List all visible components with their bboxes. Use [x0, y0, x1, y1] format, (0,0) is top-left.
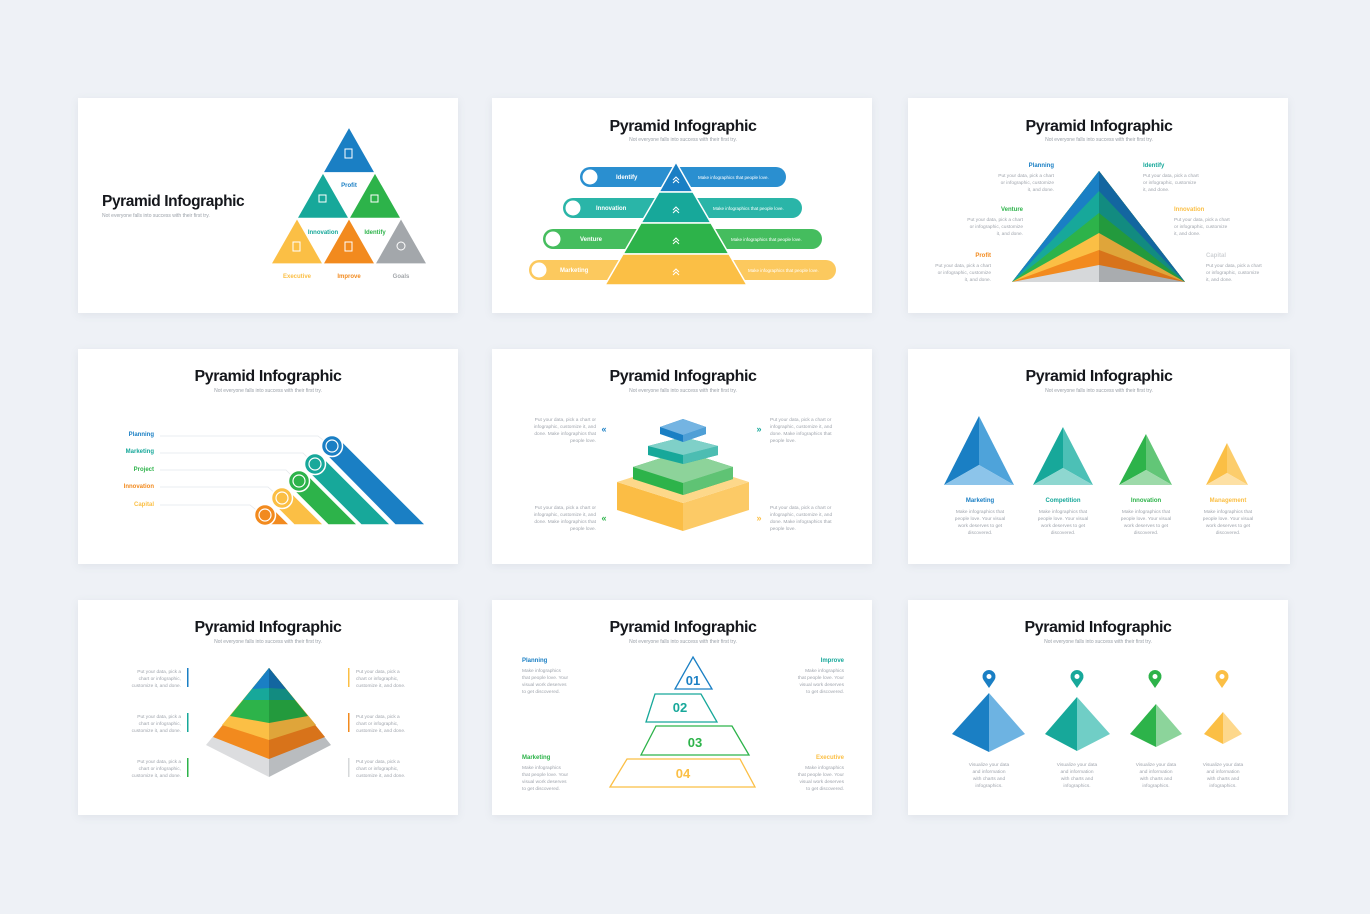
left labels: Venture [1001, 207, 1024, 213]
left labels: Profit [975, 253, 991, 259]
side texts: to get discovered. [806, 689, 844, 695]
text blocks: Put your data, pick a chart or [535, 505, 596, 511]
numbers [673, 673, 702, 781]
text blocks: infographic, customize it, and [770, 512, 832, 518]
title: Pyramid Infographic [102, 193, 245, 210]
panel: slide 2 pyramid with pills [492, 98, 872, 313]
labels: Competition [1046, 498, 1081, 504]
title: Not everyone falls into success with their first try. [102, 213, 210, 219]
text blocks: Put your data, pick a [356, 759, 400, 765]
side texts: to get discovered. [522, 786, 560, 792]
bands [254, 436, 426, 526]
side texts: visual work deserves [799, 682, 845, 688]
title: Pyramid Infographic [609, 118, 757, 135]
captions: Visualize your data [1136, 762, 1177, 768]
text blocks: done. Make infographics that [534, 431, 597, 437]
text blocks: customize it, and done. [132, 728, 181, 734]
text blocks: done. Make infographics that [770, 519, 832, 525]
labels: work deserves to get [1206, 523, 1251, 529]
side texts: Improve [821, 658, 845, 664]
left labels: Planning [1029, 163, 1054, 169]
left labels [935, 163, 1055, 283]
text blocks: Put your data, pick a [137, 714, 181, 720]
text blocks: infographic, customize it, and [534, 424, 596, 430]
labels: Planning [129, 432, 154, 438]
pills: Identify [616, 175, 638, 181]
title [1025, 118, 1173, 143]
title: Not everyone falls into success with their first try. [629, 137, 737, 143]
labels: Make infographics that [1039, 509, 1088, 515]
text blocks: chart or infographic, [139, 676, 181, 682]
chevrons: » [756, 513, 762, 523]
pills: Make infographics that people love. [698, 175, 769, 180]
left labels: or infographic, customize [1001, 180, 1054, 186]
labels: work deserves to get [1124, 523, 1169, 529]
chevrons [601, 424, 762, 523]
title [609, 118, 757, 143]
right labels: Put your data, pick a chart [1174, 217, 1230, 223]
text blocks: Put your data, pick a chart or [770, 417, 832, 423]
title: Not everyone falls into success with their first try. [1045, 137, 1153, 143]
labels: Make infographics that [1204, 509, 1253, 515]
pills: Make infographics that people love. [748, 268, 819, 273]
labels: Marketing [126, 449, 154, 455]
text blocks: chart or infographic, [356, 676, 398, 682]
captions: infographics. [975, 783, 1003, 789]
captions: Visualize your data [1203, 762, 1244, 768]
text blocks: Put your data, pick a [137, 669, 181, 675]
text blocks: chart or infographic, [139, 721, 181, 727]
triangles [944, 416, 1248, 485]
text blocks: Put your data, pick a chart or [770, 505, 832, 511]
title: Not everyone falls into success with their first try. [214, 388, 322, 394]
text blocks [132, 669, 405, 779]
title: Not everyone falls into success with their first try. [1044, 639, 1152, 645]
chevrons: » [756, 424, 762, 434]
title: Not everyone falls into success with their first try. [1045, 388, 1153, 394]
title [609, 368, 757, 394]
side texts: Make infographics [805, 765, 845, 771]
captions: infographics. [1063, 783, 1091, 789]
labels: people love. Your visual [1038, 516, 1088, 522]
numbers: 02 [673, 700, 687, 715]
text blocks: people love. [570, 438, 596, 444]
text blocks [534, 417, 832, 532]
captions: Visualize your data [1057, 762, 1098, 768]
text blocks: infographic, customize it, and [534, 512, 596, 518]
text blocks: chart or infographic, [356, 766, 398, 772]
labels: Capital [134, 502, 154, 508]
title: Pyramid Infographic [1024, 619, 1172, 636]
side texts: Make infographics [522, 765, 562, 771]
title: Pyramid Infographic [194, 368, 342, 385]
panel: slide 5 stepped pyramid [492, 349, 872, 564]
side texts: Executive [816, 755, 845, 761]
text blocks: customize it, and done. [356, 683, 405, 689]
text blocks: customize it, and done. [356, 728, 405, 734]
labels: discovered. [1216, 530, 1240, 536]
triangle labels: Executive [283, 274, 312, 280]
text blocks: customize it, and done. [132, 683, 181, 689]
panel: slide 6 four triangles [908, 349, 1290, 564]
pills: Make infographics that people love. [713, 206, 784, 211]
labels: Innovation [124, 484, 154, 490]
chevrons: « [601, 424, 607, 434]
side texts: visual work deserves [522, 779, 567, 785]
text blocks: done. Make infographics that [770, 431, 832, 437]
side texts: that people love. Your [522, 772, 569, 778]
pills: Make infographics that people love. [731, 237, 802, 242]
numbers: 01 [686, 673, 700, 688]
side texts: Marketing [522, 755, 551, 761]
side texts: to get discovered. [522, 689, 560, 695]
icons in triangles [293, 149, 405, 251]
text blocks: Put your data, pick a [137, 759, 181, 765]
title: Not everyone falls into success with their first try. [629, 639, 737, 645]
captions: with charts and [1207, 776, 1239, 782]
text blocks: Put your data, pick a chart or [535, 417, 596, 423]
title [194, 368, 342, 394]
labels: discovered. [1051, 530, 1075, 536]
right labels: Innovation [1174, 207, 1205, 213]
stepped pyramid [617, 419, 749, 531]
leader lines [160, 436, 328, 513]
panel: slide 8 outline pyramid [492, 600, 872, 815]
text blocks: chart or infographic, [356, 721, 398, 727]
layered pyramid [1012, 171, 1185, 282]
side texts: visual work deserves [799, 779, 845, 785]
labels: work deserves to get [1041, 523, 1086, 529]
left labels: it, and done. [965, 277, 991, 283]
left labels: Put your data, pick a chart [998, 173, 1055, 179]
triangle labels: Profit [341, 183, 357, 189]
panel: slide 4 diagonal bands [78, 349, 458, 564]
labels: Project [134, 467, 154, 473]
title: Pyramid Infographic [194, 619, 342, 636]
right labels: it, and done. [1206, 277, 1232, 283]
text blocks: chart or infographic, [139, 766, 181, 772]
right labels: or infographic, customize [1206, 270, 1260, 276]
captions: with charts and [1061, 776, 1093, 782]
text blocks: done. Make infographics that [534, 519, 597, 525]
right labels: it, and done. [1174, 231, 1200, 237]
triangle pyramid [271, 127, 427, 264]
right labels: Capital [1206, 253, 1226, 259]
pills: Marketing [560, 268, 589, 274]
labels: people love. Your visual [1203, 516, 1253, 522]
left labels: or infographic, customize [970, 224, 1023, 230]
left labels: it, and done. [997, 231, 1023, 237]
labels: Management [1210, 498, 1246, 504]
side texts [522, 658, 845, 792]
labels: Make infographics that [956, 509, 1005, 515]
triangle labels: Goals [393, 274, 410, 280]
side texts: that people love. Your [798, 772, 844, 778]
chevrons: « [601, 513, 607, 523]
side texts: visual work deserves [522, 682, 567, 688]
title: Pyramid Infographic [1025, 368, 1173, 385]
labels: people love. Your visual [1121, 516, 1171, 522]
band icons [259, 440, 338, 521]
captions: Visualize your data [969, 762, 1010, 768]
captions: and information [1060, 769, 1094, 775]
side texts: that people love. Your [798, 675, 844, 681]
left labels: it, and done. [1028, 187, 1054, 193]
right labels: or infographic, customize [1174, 224, 1228, 230]
labels: discovered. [1134, 530, 1158, 536]
text blocks: people love. [770, 438, 796, 444]
title: Pyramid Infographic [609, 619, 757, 636]
title [1025, 368, 1173, 394]
labels: Make infographics that [1122, 509, 1171, 515]
captions: infographics. [1142, 783, 1170, 789]
captions: and information [1139, 769, 1173, 775]
side texts: to get discovered. [806, 786, 844, 792]
numbers: 03 [688, 735, 702, 750]
right labels: Identify [1143, 163, 1165, 169]
captions [969, 762, 1244, 789]
numbers: 04 [676, 766, 691, 781]
triangle labels: Identify [364, 230, 386, 236]
panel: slide 7 3D square pyramid [78, 600, 458, 815]
labels: Marketing [966, 498, 995, 504]
title: Pyramid Infographic [1025, 118, 1173, 135]
left labels: Put your data, pick a chart [935, 263, 992, 269]
central pyramid [605, 162, 747, 285]
title [194, 619, 342, 645]
side texts: Planning [522, 658, 548, 664]
bars [187, 668, 350, 777]
title: Not everyone falls into success with their first try. [214, 639, 322, 645]
text blocks: people love. [570, 526, 596, 532]
triangle labels [283, 183, 410, 280]
right labels: or infographic, customize [1143, 180, 1197, 186]
triangle labels: Improve [337, 274, 361, 280]
pills: Venture [580, 237, 603, 243]
right labels: Put your data, pick a chart [1206, 263, 1262, 269]
captions: and information [1206, 769, 1240, 775]
title [102, 193, 245, 219]
captions: and information [972, 769, 1006, 775]
labels: Innovation [1131, 498, 1161, 504]
panel: slide 9 pins and pyramids [908, 600, 1288, 815]
pills [529, 167, 836, 280]
outline levels [610, 657, 755, 787]
pyramids [952, 693, 1242, 752]
title [609, 619, 757, 645]
side texts: Make infographics [805, 668, 845, 674]
labels: discovered. [968, 530, 992, 536]
title: Not everyone falls into success with their first try. [629, 388, 737, 394]
labels [955, 498, 1253, 536]
labels [124, 432, 154, 508]
labels: people love. Your visual [955, 516, 1005, 522]
text blocks: Put your data, pick a [356, 669, 400, 675]
captions: infographics. [1209, 783, 1237, 789]
labels: work deserves to get [958, 523, 1003, 529]
captions: with charts and [1140, 776, 1172, 782]
right labels [1143, 163, 1262, 283]
text blocks: infographic, customize it, and [770, 424, 832, 430]
side texts: that people love. Your [522, 675, 569, 681]
panel: slide 3 layered triangle [908, 98, 1288, 313]
right labels: it, and done. [1143, 187, 1169, 193]
left labels: Put your data, pick a chart [967, 217, 1024, 223]
side texts: Make infographics [522, 668, 562, 674]
text blocks: people love. [770, 526, 796, 532]
triangle labels: Innovation [308, 230, 338, 236]
text blocks: customize it, and done. [356, 773, 405, 779]
panel: slide 1 triangle grid [78, 98, 458, 313]
text blocks: customize it, and done. [132, 773, 181, 779]
text blocks: Put your data, pick a [356, 714, 400, 720]
left labels: or infographic, customize [938, 270, 991, 276]
right labels: Put your data, pick a chart [1143, 173, 1199, 179]
title: Pyramid Infographic [609, 368, 757, 385]
pyramid [206, 668, 331, 777]
title [1024, 619, 1172, 645]
captions: with charts and [973, 776, 1005, 782]
pins [982, 670, 1228, 688]
pills: Innovation [596, 206, 627, 212]
